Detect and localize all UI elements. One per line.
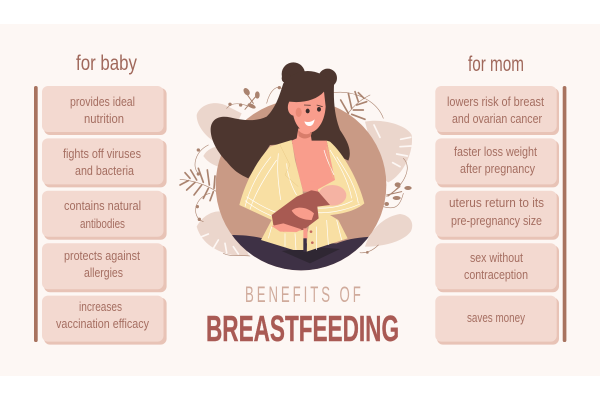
background leaves <box>197 103 412 256</box>
neck and chest <box>292 128 336 192</box>
card 2: and bacteria <box>75 163 135 178</box>
card 1 <box>435 86 559 135</box>
card 5: saves money <box>467 310 525 325</box>
title line 1: BENEFITS OF <box>245 283 361 307</box>
blanket with baby <box>272 182 346 232</box>
card 4 <box>435 243 559 292</box>
card 2: fights off viruses <box>63 146 141 161</box>
leaf slits <box>202 125 411 254</box>
panel: for baby <box>34 52 167 345</box>
card 4: allergies <box>84 265 123 280</box>
panel: for mom <box>435 53 566 345</box>
card 2 <box>435 138 559 187</box>
card 3: uterus return to its <box>449 195 544 210</box>
card 5: increases <box>79 299 122 314</box>
illustration: mother breastfeeding <box>180 62 412 277</box>
card 3: antibodies <box>80 216 125 231</box>
lapels <box>280 145 333 187</box>
side bar <box>34 86 38 342</box>
card 4: sex without <box>470 250 523 265</box>
neck shadow <box>298 130 312 139</box>
title <box>206 283 399 349</box>
shirt gap and buttons <box>303 228 314 252</box>
card 1: provides ideal <box>70 94 135 109</box>
title line 2: BREASTFEEDING <box>206 308 399 349</box>
card 3: pre-pregnancy size <box>451 213 542 228</box>
card 1: and ovarian cancer <box>452 111 543 126</box>
card 3 <box>42 191 167 240</box>
card 3 <box>435 191 559 240</box>
card 3: contains natural <box>64 198 141 213</box>
heading: for baby: for baby <box>76 52 137 75</box>
jacket stripes <box>245 150 360 250</box>
hair <box>211 62 350 178</box>
card 2: after pregnancy <box>460 161 535 176</box>
trousers <box>232 235 369 270</box>
heading: for mom: for mom <box>468 53 524 76</box>
card 5: vaccination efficacy <box>56 316 149 331</box>
card 1: nutrition <box>84 111 124 126</box>
fronds and vines <box>180 87 407 256</box>
jacket <box>239 140 364 252</box>
cheek <box>296 108 302 117</box>
card 5 <box>42 296 167 345</box>
face <box>288 92 326 133</box>
card 1: lowers risk of breast <box>447 94 544 109</box>
card 2 <box>42 138 167 187</box>
card 1 <box>42 86 167 135</box>
card 4: contraception <box>464 267 528 282</box>
backdrop circle <box>216 100 386 270</box>
card 2: faster loss weight <box>454 144 537 159</box>
card 5 <box>435 296 559 345</box>
berries <box>196 86 412 254</box>
side bar <box>563 86 566 342</box>
card 4 <box>42 243 167 292</box>
eyes and mouth <box>304 105 323 126</box>
card 4: protects against <box>64 248 140 263</box>
